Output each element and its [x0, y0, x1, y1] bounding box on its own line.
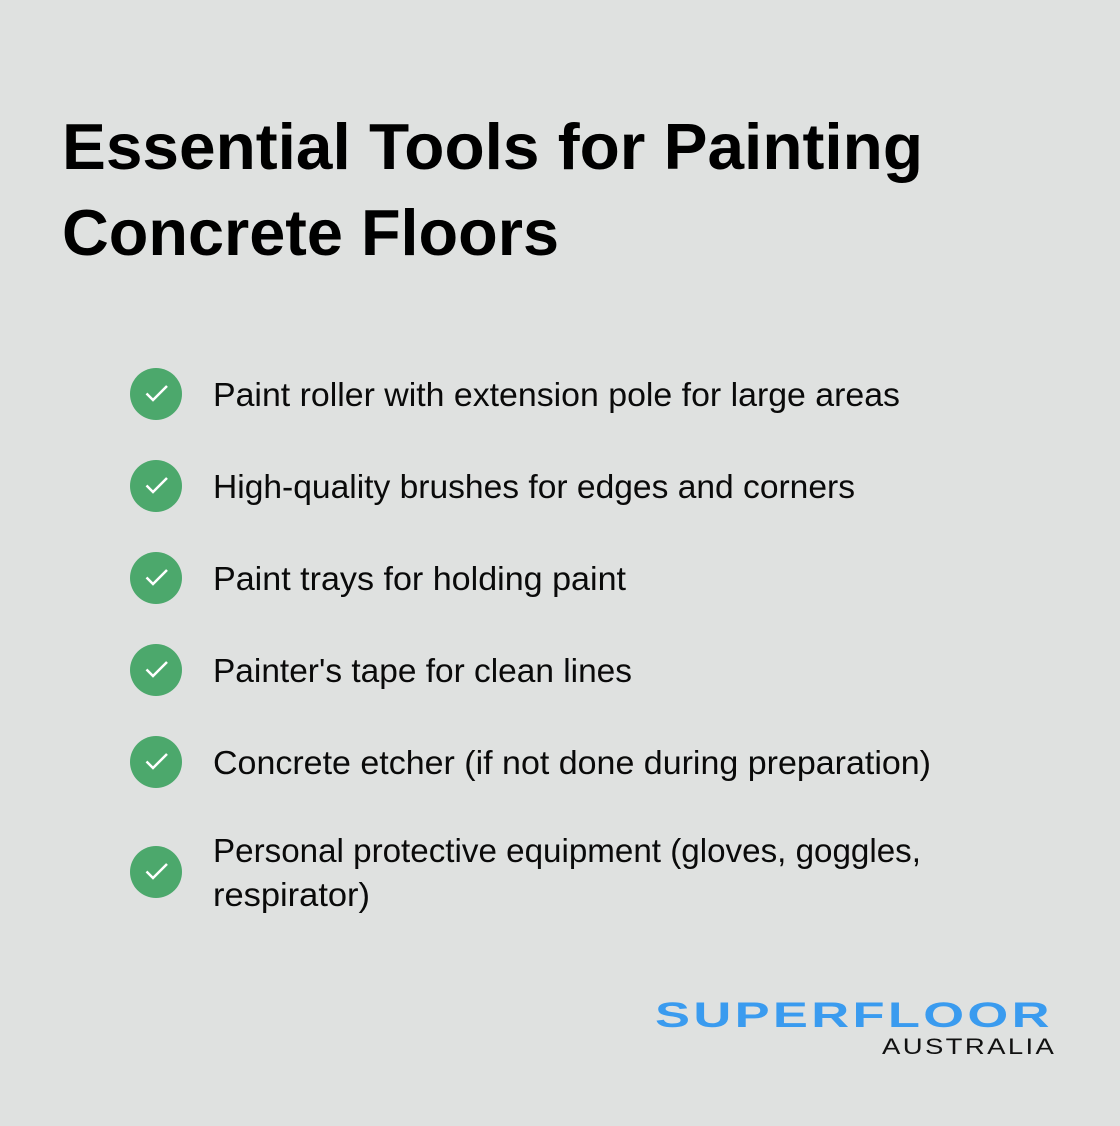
title	[62, 110, 923, 269]
item: protective equipment: respirator)	[213, 876, 370, 913]
item: painter's tape: Painter's tape for clean lines	[213, 652, 632, 689]
item: brushes	[130, 460, 855, 512]
item: paint roller	[130, 368, 900, 420]
item: concrete etcher	[130, 736, 931, 788]
title: Essential Tools for Painting	[62, 110, 923, 183]
item: paint trays: Paint trays for holding paint	[213, 560, 626, 597]
logo: Superfloor Australia: SUPERFLOOR	[655, 996, 1050, 1035]
item: paint roller: Paint roller with extension pole for large areas	[213, 376, 900, 413]
title: Concrete Floors	[62, 196, 559, 269]
item: painter's tape	[130, 644, 632, 696]
item: brushes: High-quality brushes for edges and corners	[213, 468, 855, 505]
item: protective equipment	[130, 832, 921, 913]
item: concrete etcher: Concrete etcher (if not done during preparation)	[213, 744, 931, 781]
logo: Superfloor Australia: AUSTRALIA	[882, 1035, 1054, 1059]
checklist	[130, 368, 931, 913]
item: protective equipment: Personal protective equipment (gloves, goggles,	[213, 832, 921, 869]
logo: Superfloor Australia	[655, 996, 1054, 1059]
item: paint trays	[130, 552, 626, 604]
